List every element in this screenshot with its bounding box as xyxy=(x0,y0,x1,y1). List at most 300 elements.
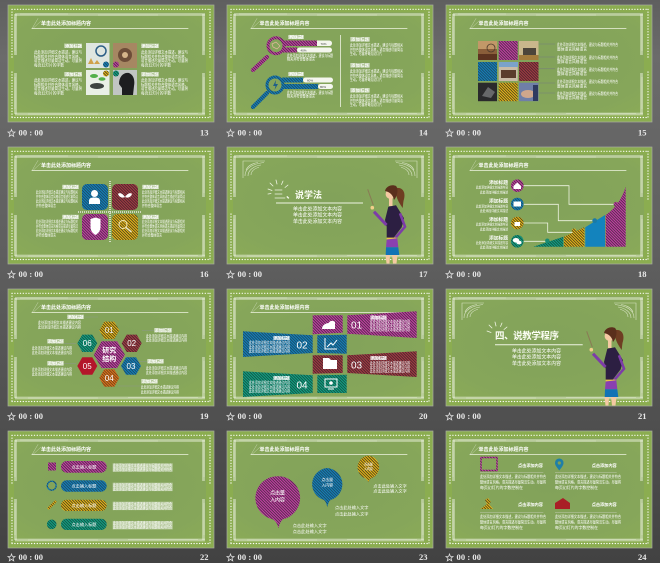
slide 13 footer: 13 xyxy=(200,128,208,138)
slide 18 frame xyxy=(446,147,652,264)
slide 13 left text: 添加标题 xyxy=(65,71,83,78)
banner 02: 02 xyxy=(296,340,308,352)
slide 19 callouts: 此处添加详细文本描述建议内容 xyxy=(146,333,187,338)
slide 19 callouts: 此处添加详细文本描述建议内容 xyxy=(32,350,72,355)
row text blocks: 此处添加详细文本描述建议与标题相关并符合 xyxy=(113,482,172,487)
slide 14 title: 单击此处添加标题内容 xyxy=(260,20,310,27)
slide 19 callouts: 此处添加详细文本描述建议内容 xyxy=(146,365,187,370)
slide 24 footer: 00 : 00 xyxy=(456,552,481,562)
slide 24 body text: 每页幻灯片的字数控制在 xyxy=(555,525,598,530)
slide 16 right text: 添加标题 xyxy=(142,184,159,191)
slide 13 left text: 语言描述尽量简洁生动。尽量将 xyxy=(34,86,82,91)
bubble captions: 点击此处输入文字 xyxy=(373,482,407,489)
slide 24 body text: 此处添加详细文本描述，建议与标题相关并符合 xyxy=(555,514,621,519)
slide 16 left text: 添加标题 xyxy=(62,184,79,191)
slide 19 callouts: 此处添加详细文本描述建议内容 xyxy=(141,389,179,394)
slide 13 badges xyxy=(103,62,119,76)
slide 15 footer: 15 xyxy=(638,128,646,138)
slide 18 labels: 此处添加详细文本描述 xyxy=(480,226,509,231)
bubble captions: 点击此处输入文字 xyxy=(373,487,407,494)
slide 24 body text: 此处添加详细文本描述，建议与标题相关并符合 xyxy=(480,474,546,479)
slide 18 footer: 00 : 00 xyxy=(456,269,481,279)
slide 22 footer xyxy=(8,552,208,562)
slide 13 right text: 此处添加详细文本描述，建议与 xyxy=(141,49,188,54)
hexagon labels: 06 xyxy=(83,339,92,348)
slide 15 title: 单击此处添加标题内容 xyxy=(478,20,528,27)
slide 16 left text: 此处添加详细文本描述建议与标题相关 xyxy=(36,228,78,233)
slide 15 text lines: 整体语言风格语言 xyxy=(557,71,587,76)
slide 13 photo grid xyxy=(86,43,137,95)
row text blocks: 此处添加详细文本描述建议与标题相关并符合 xyxy=(113,505,172,510)
slide 15 text lines xyxy=(557,42,618,100)
slide 24 body text: 此处添加详细文本描述，建议与标题相关并符合 xyxy=(555,474,621,479)
slide 17 xyxy=(227,147,433,264)
slide 24 footer xyxy=(446,552,647,562)
slide 24 body text xyxy=(480,474,621,530)
slide 18 xyxy=(446,147,652,264)
slide 24 xyxy=(446,431,652,548)
slide 22 title bar xyxy=(32,444,188,455)
slide 24 column headings xyxy=(518,462,617,508)
slide 23 title bar xyxy=(251,444,407,455)
slide 21 footer xyxy=(446,411,646,421)
slide 18 labels: 此处添加详细文本描述 xyxy=(480,189,509,194)
slide 13 right text: 语言描述尽量简洁生动。尽量将 xyxy=(141,58,188,63)
blue magnifier chart: 80% xyxy=(320,85,326,89)
slide 18 labels: 此处添加详细文本描述 xyxy=(480,208,509,213)
row pills: 点击输入标题 xyxy=(72,464,97,470)
slide 13 right text: 标题相关并符合整体语言风格， xyxy=(141,82,188,87)
slide 21 text: 单击此处添加文本内容 xyxy=(512,348,561,354)
slide 19 callouts: 此处添加详细文本描述建议内容 xyxy=(141,385,179,390)
hexagon labels: 结构 xyxy=(102,354,116,363)
slide 15 text lines: 此处添加详细文本描述，建议与标题相关并符合 xyxy=(557,91,618,96)
magenta bubble: 点击量 xyxy=(270,489,286,497)
slide 21 rule xyxy=(495,344,583,346)
slide 16 right text: 并符合整体语言 xyxy=(142,203,162,208)
slide 23 title: 单击此处添加标题内容 xyxy=(260,446,310,453)
slide 16 frame xyxy=(8,147,214,264)
slide 13 right text: 此处添加详细文本描述，建议与 xyxy=(141,77,188,82)
slide 20 xyxy=(227,289,433,406)
slide 15 text lines: 整体语言风格语言 xyxy=(557,95,587,100)
slide 19 footer: 00 : 00 xyxy=(18,411,43,421)
magenta bubble xyxy=(255,476,300,528)
slide 15 text lines: 此处添加详细文本描述，建议与标题相关并符合 xyxy=(557,67,618,72)
slide 19 callouts: 添加标题 xyxy=(48,360,64,367)
banner 03: 03 xyxy=(351,360,363,372)
slide 22 xyxy=(8,431,214,548)
slide 16 title: 单击此处添加标题内容 xyxy=(41,162,91,169)
leader lines xyxy=(64,317,154,386)
slide 15 frame xyxy=(446,5,652,122)
slide 19 callouts: 此处添加详细文本描述建议内容 xyxy=(32,372,72,377)
slide 24 frame xyxy=(446,431,652,548)
slide 24 body text: 整体语言风格，语言描述尽量简洁生动。尽量将 xyxy=(480,479,546,484)
slide 16 right text: 此处添加详细文本描述建议与标题相关 xyxy=(142,228,185,233)
blue bubble: 点击量 xyxy=(322,477,333,482)
connector lines xyxy=(538,44,555,93)
blue magnifier text: 相关并符合整体语言 xyxy=(287,94,315,99)
blue magnifier text: 添加标题 xyxy=(288,71,304,78)
slide 19 xyxy=(8,289,214,406)
slide 21 bulb icon xyxy=(487,322,507,332)
slide 13 left text: 标题相关并符合整体语言风格， xyxy=(34,54,82,59)
banner 02 xyxy=(243,331,347,357)
slide 14 right text xyxy=(350,36,403,107)
slide 14 right text: 并符合整体语言风格，语言描述尽量简洁 xyxy=(350,73,403,78)
banner 02: 此处添加详细文本描述建议内容 xyxy=(249,340,290,345)
slide 14 right text: 添加标题 xyxy=(351,36,370,43)
slide 13 left text: 语言描述尽量简洁生动。尽量将 xyxy=(34,58,82,63)
hexagon labels: 02 xyxy=(127,339,137,348)
slide 19 callouts: 添加标题 xyxy=(154,327,172,334)
slide 14 right text: 添加标题 xyxy=(351,87,370,94)
row text blocks: 此处添加详细文本描述建议与标题相关并符合 xyxy=(113,521,172,526)
slide 16 title bar xyxy=(32,160,188,171)
dashed cross xyxy=(78,181,142,243)
slide 14 frame xyxy=(227,5,433,122)
banner 02: 添加标题 xyxy=(274,334,290,342)
slide 20 frame xyxy=(227,289,433,406)
slide 15 footer: 00 : 00 xyxy=(456,128,481,138)
hexagon labels: 04 xyxy=(105,374,114,383)
slide 24 column headings: 点击添加内容 xyxy=(592,501,617,508)
slide 21 footer: 21 xyxy=(638,411,646,421)
slide 20 title: 单击此处添加标题内容 xyxy=(260,304,310,311)
slide 15 text lines: 此处添加详细文本描述，建议与标题相关并符合 xyxy=(557,79,618,84)
banner 01: 此处添加详细文本描述建议内容 xyxy=(370,327,410,332)
slide 18 footer xyxy=(446,269,646,279)
row text blocks: 此处添加详细文本描述建议与标题相关并符合 xyxy=(113,467,172,472)
slide 14 footer: 14 xyxy=(419,128,428,138)
slide 13 title bar xyxy=(32,18,188,29)
slide 24 column headings: 点击添加内容 xyxy=(518,462,544,469)
row pills xyxy=(61,461,107,530)
slide 18 footer: 18 xyxy=(638,269,646,279)
slide 24 body text: 每页幻灯片的字数控制在 xyxy=(480,485,523,490)
slide 19 callouts: 添加标题 xyxy=(68,313,84,320)
blue bubble: 入内容 xyxy=(322,482,333,488)
row text blocks: 此处添加详细文本描述建议与标题相关并符合 xyxy=(113,501,172,506)
slide 19 callouts: 添加标题 xyxy=(142,378,158,385)
slide 20 footer: 00 : 00 xyxy=(238,411,262,421)
slide 16 right text: 此处添加详细文本描述建议与标题相关 xyxy=(142,219,185,224)
slide 23 frame xyxy=(227,431,433,548)
slide 18 labels: 此处添加详细文本描述 xyxy=(480,245,509,250)
slide 24 title: 单击此处添加标题内容 xyxy=(478,446,528,453)
slide 17 rule xyxy=(276,202,363,204)
slide 19 footer: 19 xyxy=(200,411,208,421)
slide 16 right text: 添加标题 xyxy=(142,214,159,221)
slide 20 footer xyxy=(227,411,428,421)
slide 17 frame xyxy=(227,147,433,264)
slide 13 right text: 标题相关并符合整体语言风格， xyxy=(141,54,188,59)
banner 04: 此处添加详细文本描述建议内容 xyxy=(249,380,290,385)
slide 24 body text: 整体语言风格，语言描述尽量简洁生动。尽量将 xyxy=(480,519,546,524)
magenta magnifier chart: 40% xyxy=(300,48,307,52)
slide 18 labels: 添加标题 xyxy=(489,216,508,223)
slide 16 left text: 此处添加详细文本描述建议与标题相关 xyxy=(36,198,78,204)
banner 03 xyxy=(313,351,417,377)
slide 23 footer: 00 : 00 xyxy=(238,552,262,562)
bubble captions: 点击此处输入文字 xyxy=(335,510,368,518)
slide 24 body text: 整体语言风格，语言描述尽量简洁生动。尽量将 xyxy=(555,479,621,484)
slide 22 footer: 22 xyxy=(200,552,208,562)
slide 16 left text xyxy=(36,184,79,238)
slide 13 right text: 添加标题 xyxy=(142,71,159,78)
slide 21 text: 单击此处添加文本内容 xyxy=(512,354,561,361)
slide 15 text lines: 此处添加详细文本描述，建议与标题相关并符合 xyxy=(557,42,618,47)
row pills: 点击输入标题 xyxy=(72,521,97,528)
bubble captions: 点击此处输入文字 xyxy=(293,522,327,529)
slide 14 right text: 此处添加详细文本描述，建议与标题相关 xyxy=(350,42,403,47)
row icons xyxy=(47,462,56,529)
slide 19 callouts: 此处添加详细文本描述建议内容 xyxy=(146,370,187,375)
banner 01: 此处添加详细文本描述建议内容 xyxy=(370,323,410,328)
slide 14 title bar xyxy=(251,18,407,29)
blue magnifier text xyxy=(287,71,333,99)
connector lines xyxy=(523,186,615,241)
slide 18 labels: 添加标题 xyxy=(489,198,508,205)
yellow bubble xyxy=(358,456,379,482)
slide 19 frame xyxy=(8,289,214,406)
slide 15 text lines: 整体语言风格语言 xyxy=(557,46,587,51)
slide 23 footer xyxy=(227,552,428,562)
banner 04: 04 xyxy=(296,380,308,392)
slide 16 right text xyxy=(142,184,185,238)
slide 15 text lines: 整体语言风格语言 xyxy=(557,83,587,88)
slide 13 left text xyxy=(34,42,83,96)
slide 21 corner ornaments xyxy=(462,303,636,320)
slide 18 labels xyxy=(476,179,509,250)
slide 24 footer: 24 xyxy=(638,552,647,562)
slide 23 xyxy=(227,431,433,548)
slide 17 text: 单击此处添加文本内容 xyxy=(293,212,342,219)
slide 13 title: 单击此处添加标题内容 xyxy=(41,20,91,27)
slide 13 xyxy=(8,5,214,122)
slide 13 left text: 每页幻灯片的字数 xyxy=(34,91,64,96)
slide 14 right text: 此处添加详细文本描述，建议与标题相关 xyxy=(350,68,403,73)
magenta magnifier chart: 70% xyxy=(320,42,327,46)
slide 22 title: 单击此处添加标题内容 xyxy=(41,446,91,453)
slide 17 text: 单击此处添加文本内容 xyxy=(293,218,342,225)
slide 16 right text: 此处添加详细文本描述建议与标题相关 xyxy=(142,198,185,204)
slide 14 right text: 并符合整体语言风格，语言描述尽量简洁 xyxy=(350,47,403,52)
slide 19 callouts: 此处添加详细文本描述建议内容 xyxy=(38,320,81,325)
row text blocks xyxy=(113,463,173,530)
slide 17 text: 单击此处添加文本内容 xyxy=(293,206,342,212)
slide 13 left text: 添加标题 xyxy=(65,42,83,49)
row text blocks: 此处添加详细文本描述建议与标题相关并符合 xyxy=(113,525,172,530)
banner 04: 添加标题 xyxy=(274,374,290,382)
magenta magnifier text: 相关并符合整体语言 xyxy=(287,56,315,62)
slide 14 right text: 生动。尽量将每页幻灯片 xyxy=(350,77,382,82)
slide 19 title: 单击此处添加标题内容 xyxy=(41,304,91,311)
slide 23 footer: 23 xyxy=(419,552,428,562)
slide 19 callouts xyxy=(32,313,187,394)
slide 14 right text: 生动。尽量将每页幻灯片 xyxy=(350,51,382,56)
banner 01 xyxy=(313,311,417,338)
magenta magnifier text xyxy=(287,34,333,62)
four icon tiles xyxy=(82,184,138,240)
slide 13 footer xyxy=(8,128,208,138)
icon circles xyxy=(511,179,524,248)
banner 01: 添加标题 xyxy=(370,314,387,321)
slide 13 frame xyxy=(8,5,214,122)
row text blocks: 此处添加详细文本描述建议与标题相关并符合 xyxy=(113,486,172,491)
slide 16 left text: 此处添加详细文本描述建议与标题相关 xyxy=(36,219,78,224)
slide 18 labels: 添加标题 xyxy=(489,234,508,241)
magenta bubble: 入内容 xyxy=(270,495,286,503)
blue magnifier text: 此处添加详细文本描述，建议与标题 xyxy=(287,90,333,95)
slide 19 callouts: 此处添加详细文本描述建议内容 xyxy=(146,338,187,343)
slide 24 rules xyxy=(480,472,617,512)
bubble captions: 点击此处输入文字 xyxy=(335,504,368,511)
hexagon cluster xyxy=(77,322,142,387)
slide 17 footer: 17 xyxy=(419,269,428,279)
slide 21 xyxy=(446,289,652,406)
slide 17 corner ornaments xyxy=(243,161,417,178)
slide 16 left text: 并符合整体语言风格语言描述尽量简洁 xyxy=(36,224,78,228)
divider xyxy=(340,35,342,107)
slide 24 body text: 每页幻灯片的字数控制在 xyxy=(555,485,598,490)
slide 14 right text: 此处添加详细文本描述，建议与标题相关 xyxy=(350,93,403,98)
banner 04: 此处添加详细文本描述建议内容 xyxy=(249,384,290,389)
slide 16 right text: 此处添加详细文本描述建议与标题相关 xyxy=(142,190,185,194)
slide 14 footer xyxy=(227,128,428,138)
slide 13 right text: 添加标题 xyxy=(142,42,159,49)
slide 19 callouts: 添加标题 xyxy=(48,338,64,345)
slide 15 footer xyxy=(446,128,646,138)
banner 03: 添加标题 xyxy=(370,354,387,362)
slide 24 icons xyxy=(480,458,570,509)
image and stripe grid xyxy=(478,41,538,101)
magenta magnifier chart xyxy=(253,38,332,70)
slide 19 callouts: 此处添加详细文本描述建议内容 xyxy=(38,324,81,329)
slide 17 teacher figure xyxy=(368,185,405,264)
slide 16 right text: 并符合整体语言风格语言描述尽量简洁 xyxy=(142,194,185,199)
slide 19 title bar xyxy=(32,302,188,313)
slide 16 footer: 16 xyxy=(200,269,208,279)
stepped area chart xyxy=(533,187,626,247)
hexagon labels: 03 xyxy=(126,362,136,371)
slide 24 body text: 整体语言风格，语言描述尽量简洁生动。尽量将 xyxy=(555,519,621,524)
bubble captions xyxy=(293,482,407,535)
slide 19 footer xyxy=(8,411,208,421)
banner 04 xyxy=(243,371,347,397)
slide 15 xyxy=(446,5,652,122)
banner 03: 此处添加详细文本描述建议内容 xyxy=(370,360,410,365)
slide 17 text xyxy=(293,206,342,225)
slide 18 labels: 此处添加详细文本描述内容 xyxy=(476,203,509,208)
slide 17 footer xyxy=(227,269,428,279)
blue magnifier chart xyxy=(253,77,333,107)
slide 16 footer xyxy=(8,269,208,279)
row pills: 点击输入标题 xyxy=(72,482,97,490)
slide 17 bulb icon xyxy=(268,180,288,198)
banner 01: 此处添加详细文本描述建议内容 xyxy=(370,319,410,324)
slide 18 title bar xyxy=(470,160,626,171)
slide 21 heading: 四、说教学程序 xyxy=(495,330,559,342)
slide 21 text: 单击此处添加文本内容 xyxy=(512,360,561,367)
slide 13 right text: 语言描述尽量简洁生动。尽量将 xyxy=(141,86,188,91)
bubble captions: 点击此处输入文字 xyxy=(293,528,327,535)
hexagon labels: 01 xyxy=(105,326,114,335)
slide 19 callouts: 添加标题 xyxy=(148,358,164,365)
slide 16 xyxy=(8,147,214,264)
slide 21 teacher figure xyxy=(587,327,624,406)
slide 21 text xyxy=(512,348,561,367)
hexagon labels: 研究 xyxy=(102,346,116,354)
slide 14 footer: 00 : 00 xyxy=(238,128,262,138)
slide 19 callouts: 此处添加详细文本描述建议内容 xyxy=(32,367,72,372)
slide 18 labels: 此处添加详细文本描述内容 xyxy=(476,185,509,190)
slide 18 labels: 此处添加详细文本描述内容 xyxy=(476,222,509,227)
slide 16 right text: 并符合整体语言 xyxy=(142,232,162,238)
slide 16 footer: 00 : 00 xyxy=(18,269,43,279)
slide 13 left text: 标题相关并符合整体语言风格， xyxy=(34,82,82,87)
slide 16 left text: 并符合整体语言 xyxy=(36,232,56,238)
row pills: 点击输入标题 xyxy=(72,502,97,509)
slide 15 text lines: 此处添加详细文本描述，建议与标题相关并符合 xyxy=(557,55,618,60)
slide 14 right text: 生动。尽量将每页幻灯片 xyxy=(350,102,382,107)
slide 13 left text: 此处添加详细文本描述，建议与 xyxy=(34,77,82,82)
banner 03: 此处添加详细文本描述建议内容 xyxy=(370,369,410,374)
slide 15 title bar xyxy=(470,18,626,29)
slide 17 footer: 00 : 00 xyxy=(238,269,262,279)
slide 24 column headings: 点击添加内容 xyxy=(592,462,617,469)
banner 01: 01 xyxy=(351,320,363,332)
magenta magnifier text: 此处添加详细文本描述，建议与标题 xyxy=(287,53,333,58)
slide 22 footer: 00 : 00 xyxy=(18,552,43,562)
slide 14 right text: 并符合整体语言风格，语言描述尽量简洁 xyxy=(350,98,403,103)
blue bubble xyxy=(312,468,342,507)
slide 13 right text: 每页幻灯片的字数 xyxy=(141,91,171,96)
slide 13 left text: 此处添加详细文本描述，建议与 xyxy=(34,49,82,54)
slide 21 frame xyxy=(446,289,652,406)
hexagon labels: 05 xyxy=(83,362,92,371)
slide 18 labels: 此处添加详细文本描述内容 xyxy=(476,240,509,245)
slide 24 body text: 每页幻灯片的字数控制在 xyxy=(480,525,523,530)
slide 16 left text: 此处添加详细文本描述建议与标题相关 xyxy=(36,190,78,194)
slide 22 frame xyxy=(8,431,214,548)
hexagon labels xyxy=(83,326,137,383)
slide 13 right text xyxy=(141,42,188,96)
banner 03: 此处添加详细文本描述建议内容 xyxy=(370,364,410,369)
slide 16 left text: 并符合整体语言风格语言描述尽量简洁 xyxy=(36,194,78,199)
slide 24 body text: 此处添加详细文本描述，建议与标题相关并符合 xyxy=(480,514,546,519)
slide 16 left text: 并符合整体语言 xyxy=(36,203,56,208)
slide 13 footer: 00 : 00 xyxy=(18,128,43,138)
banner 04: 此处添加详细文本描述建议内容 xyxy=(249,389,290,394)
magenta magnifier text: 添加标题 xyxy=(288,34,304,41)
blue magnifier chart: 60% xyxy=(307,78,313,82)
slide 24 column headings: 点击添加内容 xyxy=(518,501,544,508)
yellow bubble: 点击量 xyxy=(364,462,374,466)
slide 13 right text: 每页幻灯片的字数 xyxy=(141,63,171,68)
slide 21 footer: 00 : 00 xyxy=(456,411,481,421)
slide 18 title: 单击此处添加标题内容 xyxy=(478,162,528,169)
slide 16 left text: 添加标题 xyxy=(62,214,79,221)
slide 17 heading: 、说学法 xyxy=(286,189,322,200)
slide 14 right text: 添加标题 xyxy=(351,62,370,69)
slide 14 xyxy=(227,5,433,122)
slide 24 title bar xyxy=(470,444,626,455)
slide 20 footer: 20 xyxy=(419,411,428,421)
slide 13 left text: 每页幻灯片的字数 xyxy=(34,63,64,68)
slide 18 labels: 添加标题 xyxy=(489,179,508,186)
